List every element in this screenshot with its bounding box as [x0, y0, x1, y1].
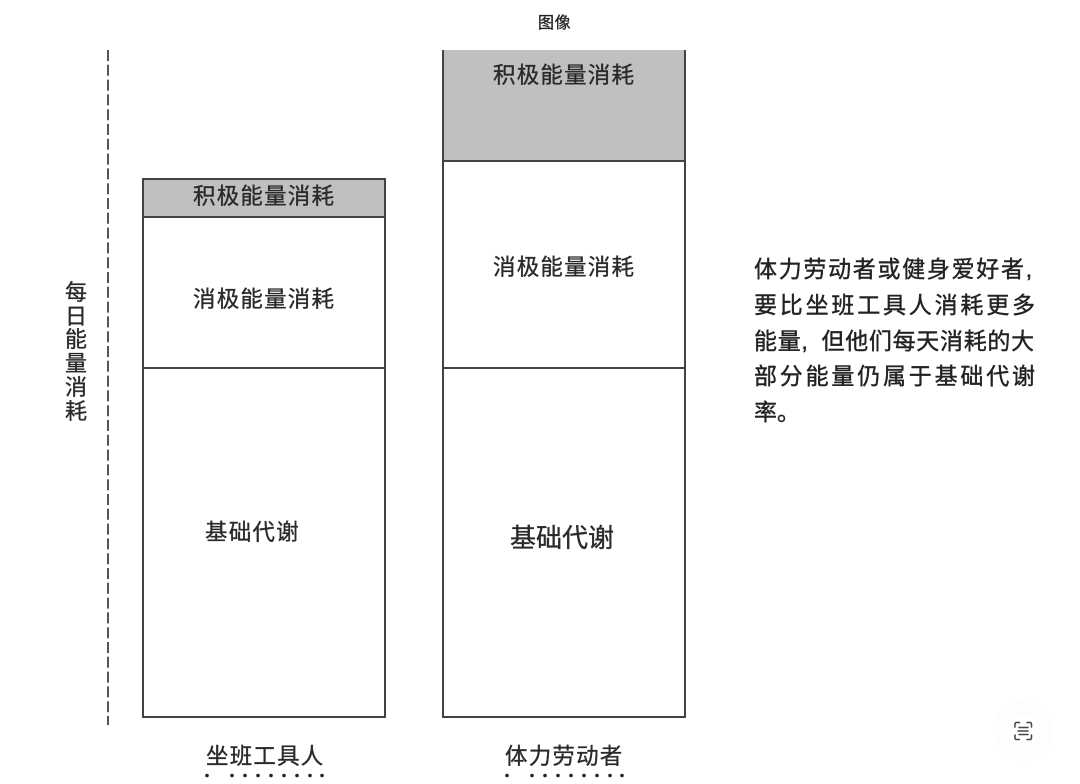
segment: passive energy: [142, 216, 386, 369]
text block: explanation: 率。: [754, 399, 800, 425]
axis label: 量: [65, 351, 87, 376]
axis label: 日: [65, 304, 87, 329]
axis label: [65, 280, 87, 424]
text block: explanation: 能量, 但他们每天消耗的大: [754, 328, 1035, 354]
bar: sedentary worker: [142, 178, 386, 718]
segment: basal metabolism: [142, 367, 386, 718]
segment: basal metabolism: [442, 367, 686, 718]
axis label: 耗: [65, 399, 87, 424]
bar: manual worker: [442, 50, 686, 718]
text block: explanation: [754, 256, 1038, 425]
label: passive energy, left bar: 消极能量消耗: [193, 287, 335, 312]
segment: active energy: [142, 178, 386, 218]
label: passive energy, right bar: 消极能量消耗: [493, 255, 635, 280]
title: 图像: [538, 14, 571, 32]
category label: sedentary worker: 坐班工具人: [206, 744, 325, 769]
text block: explanation: 部分能量仍属于基础代谢: [754, 363, 1038, 389]
axis label: 能: [65, 327, 87, 352]
emphasis dots: sedentary worker: [205, 774, 324, 778]
text block: explanation: 要比坐班工具人消耗更多: [754, 292, 1038, 318]
label: basal metabolism, right bar: 基础代谢: [510, 523, 614, 553]
segment: active energy: [442, 50, 686, 162]
label: active energy, left bar: 积极能量消耗: [193, 184, 335, 209]
text block: explanation: 体力劳动者或健身爱好者,: [754, 256, 1034, 282]
label: active energy, right bar: 积极能量消耗: [493, 63, 635, 88]
category label: manual worker: 体力劳动者: [505, 744, 624, 769]
segment: passive energy: [442, 160, 686, 369]
axis label: 每: [65, 280, 87, 305]
icon: scan text button: [1014, 722, 1032, 740]
axis label: 消: [65, 375, 87, 400]
emphasis dots: manual worker: [505, 774, 624, 778]
label: basal metabolism, left bar: 基础代谢: [205, 520, 300, 545]
